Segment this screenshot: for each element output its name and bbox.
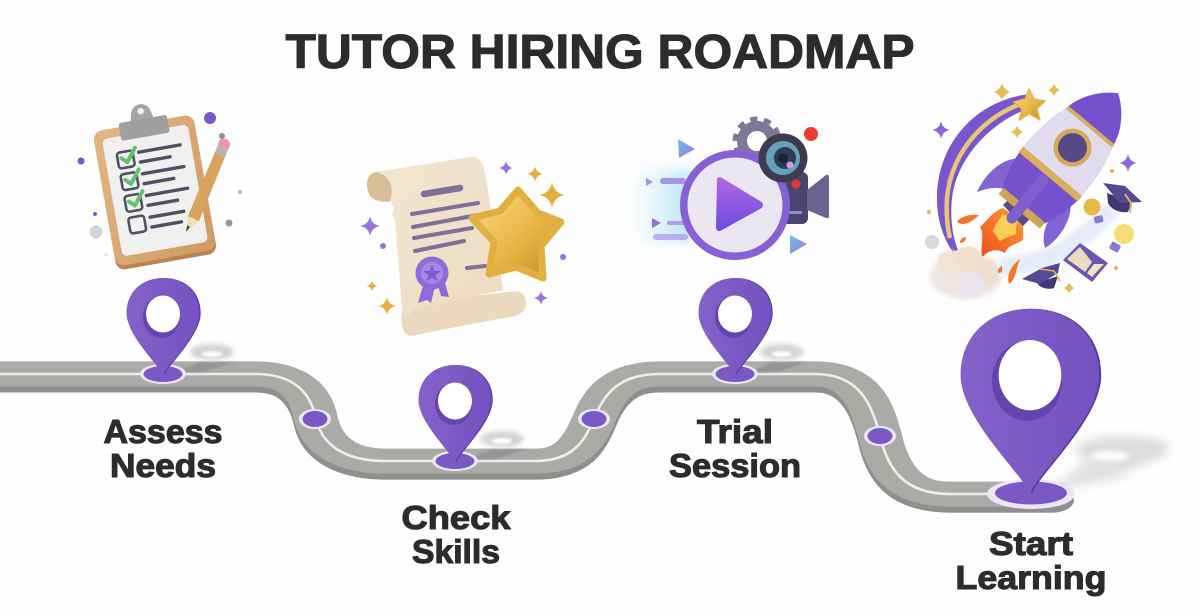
ribbon seal — [416, 256, 449, 303]
label: trial session: Session — [669, 447, 801, 484]
checklist rows — [117, 142, 194, 234]
pin 4: start learning — [961, 309, 1170, 509]
road side edge — [0, 380, 1052, 500]
label: check skills: Check — [402, 499, 511, 536]
gold star on trail — [1014, 89, 1045, 120]
gear — [736, 120, 778, 162]
title: TUTOR HIRING ROADMAP — [286, 26, 914, 79]
sparkles — [360, 161, 566, 305]
flame — [957, 208, 1024, 284]
label: start learning: Learning — [956, 559, 1106, 596]
label: check skills: Skills — [412, 533, 500, 570]
road milestone dots — [299, 409, 896, 446]
scroll paper — [376, 157, 503, 317]
icon: clipboard checklist — [78, 95, 242, 271]
sparkles and dots — [925, 84, 1137, 294]
camera body — [782, 172, 829, 224]
camera lens — [758, 134, 808, 182]
arc trail — [937, 94, 1030, 252]
pencil — [186, 138, 230, 232]
rocket body — [990, 69, 1148, 236]
play button ring — [680, 150, 790, 260]
label: assess needs — [104, 413, 222, 484]
floating play triangles — [678, 139, 807, 254]
pin 2: check skills — [418, 365, 527, 471]
speed trails — [632, 170, 692, 242]
centre fin — [1012, 180, 1043, 218]
light bulbs — [1084, 198, 1134, 253]
bottom curl — [402, 291, 526, 336]
rocket fins — [977, 158, 1071, 248]
cloud — [930, 246, 1002, 299]
icon: rocket launch — [925, 69, 1148, 299]
open book — [1063, 243, 1108, 282]
clip — [128, 102, 154, 123]
gold star — [472, 190, 561, 278]
icon: video play and camera — [632, 120, 829, 260]
red record dot — [804, 127, 818, 141]
label: check skills — [402, 499, 511, 570]
road centre line — [0, 374, 1030, 494]
label: start learning: Start — [989, 525, 1073, 562]
icon: certificate scroll with star — [360, 157, 566, 336]
top curl — [367, 171, 392, 202]
label: assess needs: Assess — [104, 413, 222, 450]
label: assess needs: Needs — [110, 447, 216, 484]
label: trial session — [669, 413, 801, 484]
text lines — [412, 188, 485, 268]
label: start learning — [956, 525, 1106, 596]
pale blue trail — [1000, 208, 1112, 266]
clipboard board — [89, 95, 217, 271]
road surface — [0, 374, 1052, 494]
decorative dots — [78, 112, 242, 257]
pin 1: assess needs — [126, 278, 235, 384]
pin 3: trial session — [698, 278, 807, 384]
graduation caps — [1022, 183, 1142, 289]
road — [0, 374, 1052, 500]
label: trial session: Trial — [697, 413, 773, 450]
rocket nozzle — [1003, 195, 1033, 226]
